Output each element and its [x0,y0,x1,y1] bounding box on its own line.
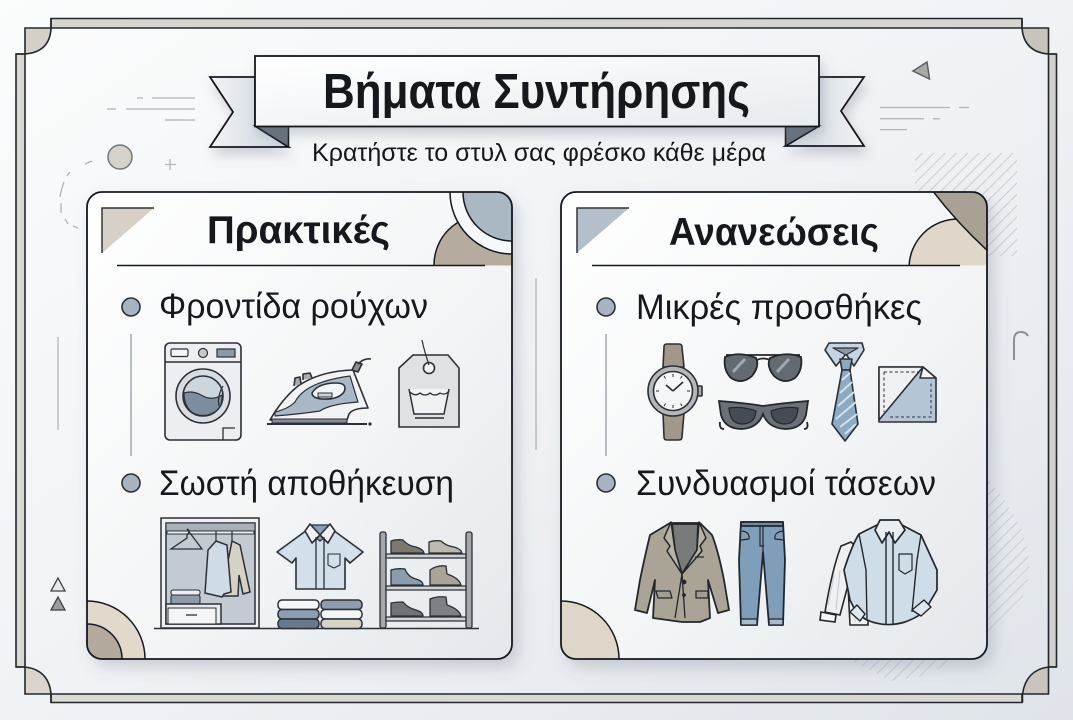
item: Μικρές προσθήκες: Μικρές προσθήκες [636,288,922,327]
icon: shoe rack [380,532,472,628]
item: Σωστή αποθήκευση: Σωστή αποθήκευση [159,464,454,503]
ribbon left tail [210,77,288,147]
floor line [154,628,479,630]
icon: folded clothes [278,600,362,628]
panel border [561,192,987,659]
panel: Πρακτικές [86,191,524,673]
icon: wayfarer sunglasses [719,401,808,429]
icon: long sleeve shirt [844,520,937,625]
icon: pocket square [879,367,936,422]
title ribbon [210,56,864,147]
panel corner decorations [562,192,986,658]
panel heading: Πρακτικές [207,209,390,252]
ribbon main band [255,56,819,126]
panel heading: Ανανεώσεις [669,211,879,254]
corner triangle [102,208,154,253]
icon: iron [267,359,371,425]
icon: aviator sunglasses [725,354,801,381]
icon: short sleeve shirt [277,524,363,589]
icon: care label [399,340,459,427]
panel: Ανανεώσεις [560,191,999,673]
icon: striped shirt behind [820,542,868,625]
item: Φροντίδα ρούχων: Φροντίδα ρούχων [159,287,428,326]
title: Βήματα Συντήρησης [323,65,750,119]
ribbon right tail [786,77,864,146]
icon: washing machine [165,343,241,440]
background decorations [51,62,1029,681]
panel corner decorations [88,192,512,658]
icon: striped tie [825,343,864,441]
icon: wristwatch [648,344,702,440]
icon: wardrobe [161,518,259,628]
icon: jeans [739,522,785,625]
panel border [87,192,512,659]
item: Συνδυασμοί τάσεων: Συνδυασμοί τάσεων [636,464,936,503]
corner triangle [577,208,629,253]
subtitle: Κρατήστε το στυλ σας φρέσκο κάθε μέρα [312,139,766,167]
icon: blazer [635,522,729,622]
